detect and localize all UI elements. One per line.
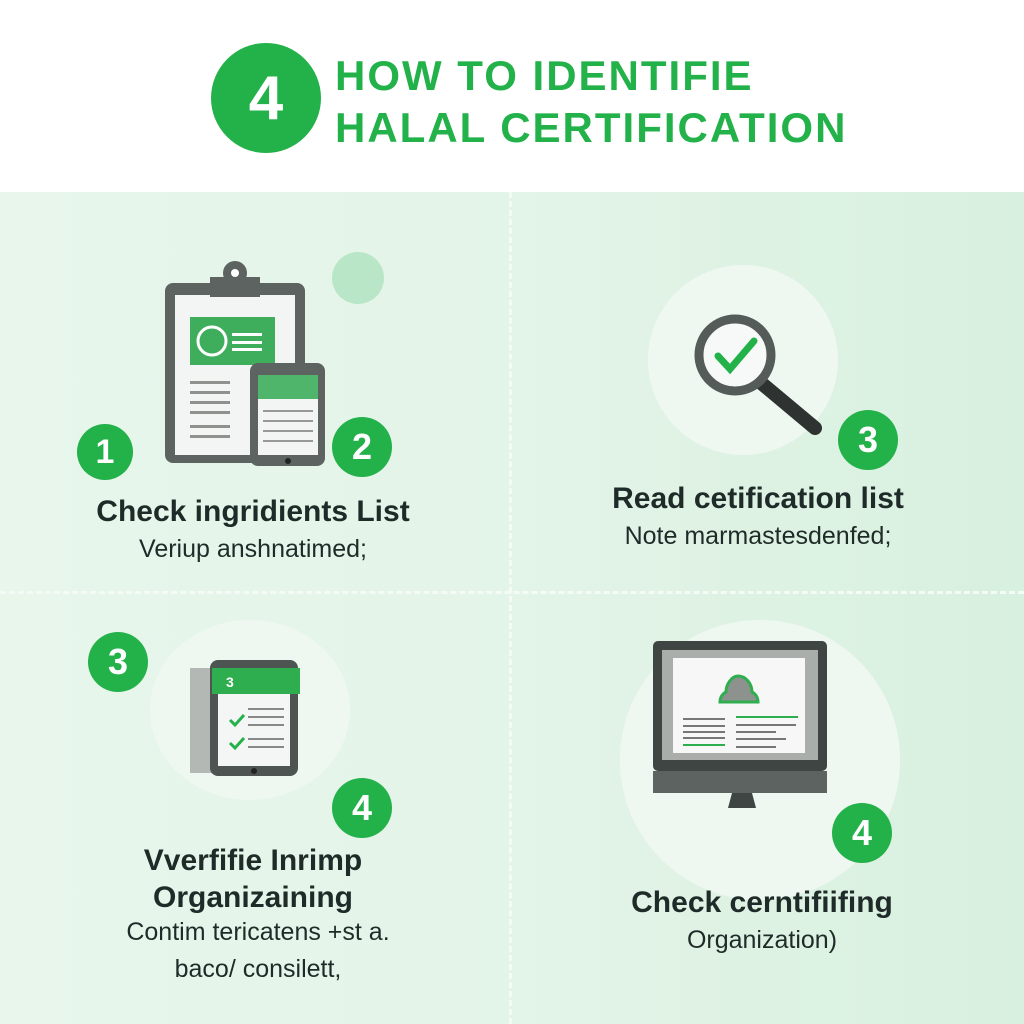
panel 4 text: Check cerntifiifing [631, 886, 893, 919]
panel 3 text [144, 844, 362, 914]
badge 3 [838, 410, 898, 470]
panel 1 text: Check ingridients List [96, 495, 410, 528]
panel 2: magnifier icon [694, 314, 822, 435]
title [335, 52, 847, 151]
title badge [211, 43, 321, 153]
title: HOW TO IDENTIFIE [335, 52, 754, 99]
panel 3 text: Organizaining [153, 881, 353, 914]
badge 3: 3 [858, 419, 878, 460]
panel 3: tablet icon: 3 [226, 674, 234, 690]
badge 4 (panel 3) [332, 778, 392, 838]
panel 2 text: Read cetification list [612, 482, 904, 515]
panel 3 text: Vverfifie Inrimp [144, 844, 362, 877]
badge 2: 2 [352, 426, 372, 467]
title badge: 4 [249, 64, 283, 132]
text: Veriup anshnatimed; [139, 535, 367, 563]
decorative circles [332, 252, 384, 304]
text: Contim tericatens +st a. [126, 918, 390, 946]
panel 3: tablet icon [190, 660, 300, 776]
badge 2 [332, 417, 392, 477]
text: Note marmastesdenfed; [625, 522, 891, 550]
panel 4: monitor icon [653, 641, 827, 808]
badge 1 [77, 424, 133, 480]
badge 4 (panel 4): 4 [852, 812, 872, 853]
title: HALAL CERTIFICATION [335, 104, 847, 151]
text: Organization) [687, 926, 837, 954]
badge 4 (panel 3): 4 [352, 787, 372, 828]
panel 1: clipboard icon [165, 261, 325, 466]
badge 3 (panel 3): 3 [108, 641, 128, 682]
text: baco/ consilett, [175, 955, 341, 983]
badge 3 (panel 3) [88, 632, 148, 692]
badge 4 (panel 4) [832, 803, 892, 863]
badge 1: 1 [96, 432, 114, 470]
